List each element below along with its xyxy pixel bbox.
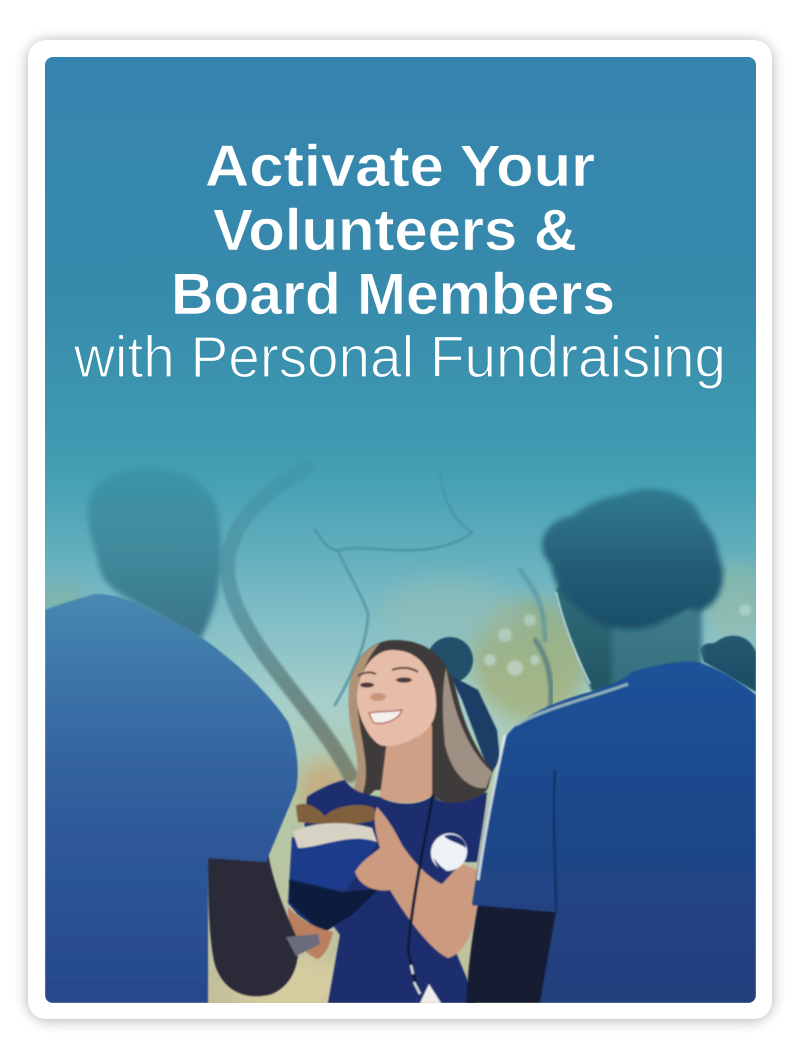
- man on left: body: [45, 594, 320, 1003]
- shirt: [472, 662, 756, 1003]
- forearm and hand: [355, 807, 479, 958]
- panel background gradient: [45, 57, 756, 1003]
- bokeh highlights in foliage: [484, 604, 751, 676]
- globe logo: [430, 832, 468, 872]
- eyebrows: [358, 668, 418, 676]
- man on right: head and hair: [542, 489, 723, 692]
- woman volunteer: [288, 640, 493, 1003]
- held shirt: [287, 839, 376, 927]
- title line: Volunteers &: Volunteers &: [213, 198, 577, 263]
- black sleeve arm: [466, 905, 557, 1003]
- hair: [345, 640, 493, 810]
- hand: [286, 934, 320, 956]
- tree trunk and branches: [228, 466, 551, 775]
- title line: Activate Your: Activate Your: [205, 134, 595, 199]
- shoulder highlight: [516, 684, 628, 725]
- man on left: head: [88, 467, 221, 640]
- curly hair: [542, 489, 723, 629]
- man on right: body: [466, 662, 756, 1003]
- background person, right edge: [700, 636, 756, 692]
- face: [357, 650, 436, 746]
- subtitle: with Personal Fundraising: [73, 325, 726, 390]
- navy shirt: [300, 780, 487, 1003]
- foliage backdrop: [40, 562, 765, 1015]
- lower arm: [288, 907, 333, 959]
- title line: Board Members: Board Members: [171, 262, 615, 327]
- hair highlights: [443, 668, 492, 788]
- face: [554, 585, 616, 692]
- title: [73, 134, 726, 390]
- eyes: [360, 682, 374, 688]
- background person behind woman: [427, 637, 500, 775]
- sleeve highlight: [478, 735, 505, 880]
- nose: [370, 693, 386, 701]
- neck: [610, 608, 706, 684]
- stuffed toy: [296, 804, 375, 824]
- top colour fade over photo: [87, 458, 756, 648]
- arm: [208, 850, 298, 996]
- shirt: [45, 594, 298, 1003]
- smile: [369, 710, 402, 724]
- neck and chest: [380, 725, 432, 803]
- lanyard and badge: [408, 795, 433, 985]
- sleeve seam: [554, 770, 556, 912]
